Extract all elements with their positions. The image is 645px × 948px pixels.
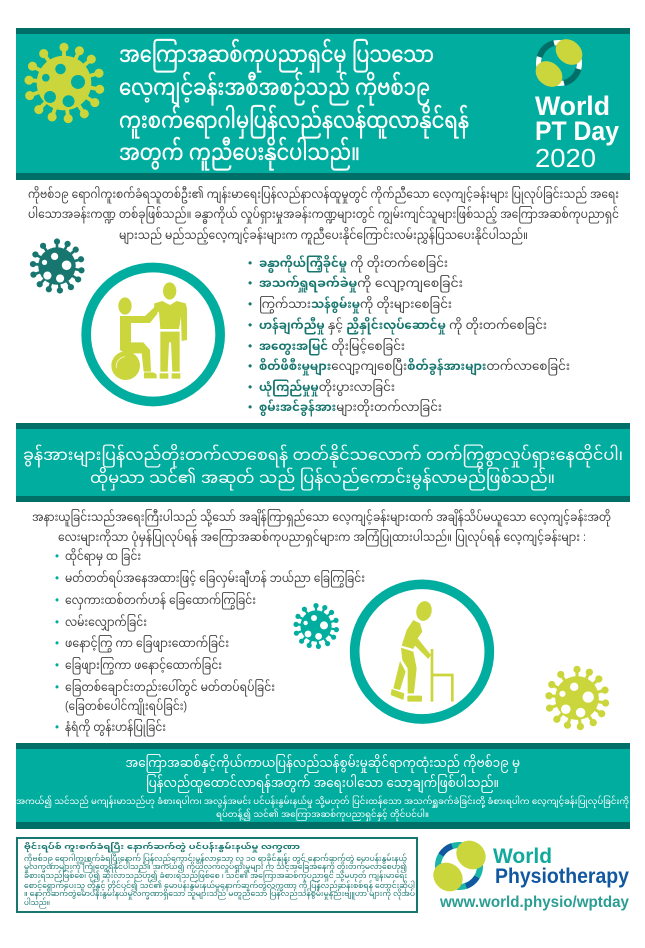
banner: key message: အကြောအဆစ်နှင့်ကိုယ်ကာယပြန်လည်သန်စွမ်းမှုဆိုင်ရာကုထုံးသည် ကိုဗစ်၁၉ မှ [126,754,520,773]
box heading: ဗိုင်းရပ်စ် ကူးစက်ခံရပြီး နောက်ဆက်တွဲ ပင်ပန်းနွမ်းနယ်မှု လက္ခဏာ [24,842,300,852]
bullet list: exercises: ခြေတစ်ချောင်းတည်းပေါ်တွင် မတ်တပ်ရပ်ခြင်း [65,680,275,696]
bullet list: exercises: • [55,595,59,607]
bullet list: benefits: အတွေးအမြင် တိုးမြင့်စေခြင်း [259,336,405,356]
banner: key message [16,743,630,829]
bullet list: exercises: • [55,722,59,734]
bullet list: exercises: • [55,638,59,650]
bullet list: exercises: ခြေဖျားကြွကာ ဖနောင့်ထောက်ခြင်း [65,658,222,674]
rest paragraph: လေးများကိုသာ ပုံမှန်ပြုလုပ်ရန် အကြောအဆစ်ကုပညာရှင်များက အကြံပြုထားပါသည်။ ပြုလုပ်ရန် လေ့ကျင့်ခန်းများ : [58,530,586,546]
icon: lime virus [545,666,609,730]
icon: dark teal virus [30,238,85,294]
title: လေ့ကျင့်ခန်းအစီအစဉ်သည် ကိုဗစ်၁၉ [119,71,430,106]
intro paragraph: များသည် မည်သည့်လေ့ကျင့်ခန်းများက ကူညီပေးနိုင်ကြောင်းလမ်းညွှန်ပြသပေးနိုင်ပါသည်။ [119,228,528,244]
box body [24,853,415,908]
banner: key message: အကယ်၍ သင်သည် မကျန်းမာသည်ဟု ခံစားရပါက၊ အလွန်အမင်း ပင်ပန်းနွမ်းနယ်မှု သို့မဟုတ် ပြင်းထန်သော အသက်ရှူခက်ခဲခြင်းတို့ ခံစားရပါက လေ့ကျင့်ခန်းပြုလုပ်ခြင်းကို [16,794,629,809]
box body: မှုလက္ခဏာများကို ကြုံတွေ့ရနိုင်ပါသည်။ အကယ်၍ ကိုယ်လက်လှုပ်ရှားမှုများ က သင့်အခြေအနေကို တိုးတက်မလာစေဟု၍ [24,861,407,873]
bullet list: exercises: • [55,551,59,563]
logo: World PT Day 2020 [531,34,619,173]
bullet list: benefits: • [248,297,252,311]
box body: ကိုဗစ်၁၉ ရောဂါကူးစက်ခံရပြီးနောက် ပြန်လည်ကောင်းမွန်လာသော လူ ၁၀ ရာခိုင်နှုန်း တွင် နောက်ဆက်တွဲ မောပန်းနွမ်းနယ် [24,853,407,865]
bullet list: benefits: ခန္ဓာကိုယ်ကြံ့ခိုင်မှု ကို တိုးတက်စေခြင်း [259,253,448,274]
bullet list: exercises: (ခြေတစ်ပေါင်ကျိုးရပ်ခြင်း) [65,699,187,715]
bullet list: benefits: ဟန်ချက်ညီမှု နှင့် ညှိနှိုင်းလုပ်ဆောင်မှု ကို တိုးတက်စေခြင်း [259,315,547,336]
banner: key message: ရပ်တန့်၍ သင်၏ အကြောအဆစ်ကုပညာရှင်နှင့် တိုင်ပင်ပါ။ [216,807,429,821]
logo: World Physiotherapy: www.world.physio/wptday [439,894,629,911]
bullet list: benefits: • [248,359,252,373]
bullet list: benefits: စိတ်ဖိစီးမှုများလျော့ကျစေပြီးစိတ်ခွန်အားများတက်လာစေခြင်း [259,356,570,377]
bullet list: exercises: • [55,573,59,585]
bullet list: benefits: • [248,256,252,270]
icon: lime virus [24,43,104,123]
box body: ပါသည်။ [24,897,50,908]
bullet list: exercises: • [55,660,59,672]
bullet list: exercises: ဖနောင့်ကြွ ကာ ခြေဖျားထောက်ခြင်း [65,636,229,652]
box body: ခံစားရသည်ဖြစ်စေ၊ ပုံ၍ ဆိုးလာသည်ဟု၍ ခံစားရသည်ဖြစ်စေ ၊ သင်၏ အကြောအဆစ်ကုပညာရှင် သို့မဟုတ် ကျန်းမာရေး [24,870,407,882]
bullet list: benefits: • [248,380,252,394]
bullet list: exercises: • [55,682,59,694]
banner: keep active: ထိုမှသာ သင်၏ အဆုတ် သည် ပြန်လည်ကောင်းမွန်လာမည်ဖြစ်သည်။ [90,468,555,490]
box body: စောင့်ရှောက်ပေးသူ တို့နှင့် တိုင်ပင်၍ သင်၏ မောပန်းနွမ်းနယ်မှုနောက်ဆက်တွဲလက္ခဏာ ကို ပြန်လည်ဆန်းစစ်ရန် တောင်းဆိုပါ [24,880,415,892]
post-viral fatigue box [17,838,417,912]
bullet list: benefits [248,253,570,417]
icon: teal virus [293,603,339,649]
banner: keep active: ခွန်အားများပြန်လည်တိုးတက်လာစေရန် တတ်နိုင်သလောက် တက်ကြွစွာလှုပ်ရှားနေထိုင်ပါ၊ [23,445,623,467]
logo: World PT Day 2020: 2020 [535,143,596,173]
bullet list: benefits: ယုံကြည်မှုမှုတိုးပွားလာခြင်း [259,377,395,398]
bullet list: exercises: • [55,617,59,629]
bullet list: exercises: မတ်တတ်ရပ်အနေအထားဖြင့် ခြေလှမ်းချီဟန် ဘယ်ညာ ခြေကြွခြင်း [65,571,365,587]
header banner [16,28,630,180]
title: အကြောအဆစ်ကုပညာရှင်မှ ပြသသော [119,38,434,73]
title: ကူးစက်ရောဂါမှပြန်လည်နလန်ထူလာနိုင်ရန် [119,104,469,139]
logo: World PT Day 2020: World [535,91,610,121]
title [119,38,469,171]
intro paragraph: ပါသောအခန်းကဏ္ဍ တစ်ခုဖြစ်သည်။ ခန္ဓာကိုယ် လှုပ်ရှားမှုအခန်းကဏ္ဍများတွင် ကျွမ်းကျင်သူများဖြစ်သည့် အကြောအဆစ်ကုပညာရှင် [28,207,619,224]
bullet list: benefits: • [248,276,252,290]
bullet list: exercises: နံရံကို တွန်းဟန်ပြုခြင်း [65,720,166,736]
bullet list: exercises: လမ်းလျှောက်ခြင်း [65,615,147,632]
banner: key message: ပြန်လည်ထူထောင်လာရန်အတွက် အရေးပါသော သော့ချက်ဖြစ်ပါသည်။ [146,774,499,793]
box body: ။ နောက်ဆက်တွဲမောပန်းနွမ်းနယ်မှုလက္ခဏာရှိသော သူများသည် မတူညီသော ပြန်လည်သန်စွမ်းမှုနည်းဗျူဟာ များကို လိုအပ် [24,888,415,900]
bullet list: benefits: ကြွက်သားသန်စွမ်းမှုကို တိုးများစေခြင်း [259,294,452,314]
bullet list: exercises: ထိုင်ရာမှ ထ ခြင်း [65,549,141,565]
banner: keep active [16,423,630,502]
intro paragraph [28,187,619,244]
bullet list: benefits: • [248,400,252,414]
bullet list: benefits: • [248,318,252,332]
bullet list: exercises: လှေကားထစ်တက်ဟန် ခြေထောက်ကြွခြင်း [65,593,256,609]
bullet list: exercises [55,549,365,736]
rest paragraph: အနားယူခြင်းသည်အရေးကြီးပါသည် သို့သော် အချိန်ကြာရှည်သော လေ့ကျင့်ခန်းများထက် အချိန်သိပ်မယူသော လေ့ကျင့်ခန်းအတို [32,510,611,526]
icon: older person with walker [355,584,489,719]
bullet list: benefits: အသက်ရှူရခက်ခဲမှု ကို လျော့ကျစေခြင်း [259,273,463,293]
bullet list: benefits: စွမ်းအင်ခွန်အားများတိုးတက်လာခြင်း [259,397,442,417]
logo: World PT Day 2020: PT Day [535,116,619,146]
icon: physiotherapist with person on exercise ball [86,267,220,401]
title: အတွက် ကူညီပေးနိုင်ပါသည်။ [119,136,360,171]
rest paragraph [32,510,611,546]
bullet list: benefits: • [248,339,252,353]
logo: World Physiotherapy [427,835,629,911]
logo: World Physiotherapy: Physiotherapy [495,865,629,888]
logo: World Physiotherapy: World [493,845,552,868]
